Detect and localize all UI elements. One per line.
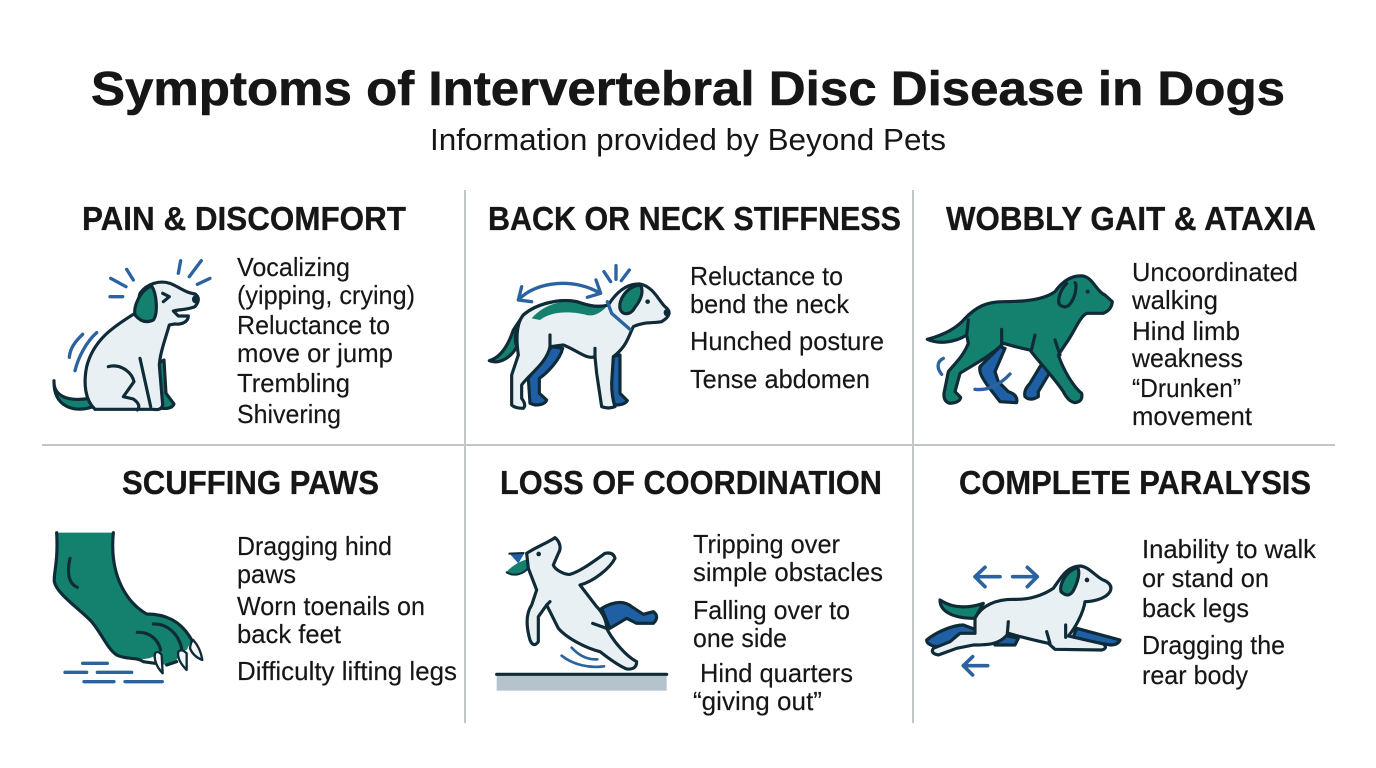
- subtitle: Information provided by Beyond Pets: [430, 122, 946, 157]
- icon: falling dog: [497, 538, 667, 691]
- icon: standing dog with stiff back: [489, 266, 670, 408]
- symptom list: “Drunken”: [1132, 373, 1241, 403]
- symptom list: back legs: [1142, 593, 1249, 623]
- symptom list: Dragging the: [1142, 630, 1285, 660]
- panel: scuffing paws: [54, 464, 457, 686]
- symptom list: move or jump: [237, 338, 393, 368]
- symptom list: [237, 252, 415, 429]
- symptom list: [690, 261, 884, 394]
- icon: paralysed dog dragging rear: [927, 566, 1120, 675]
- symptom list: Uncoordinated: [1132, 257, 1298, 287]
- heading: complete paralysis: COMPLETE PARALYSIS: [959, 464, 1311, 501]
- symptom list: Tripping over: [693, 529, 840, 559]
- symptom list: Worn toenails on: [237, 591, 425, 621]
- symptom list: [693, 529, 883, 716]
- title: Symptoms of Intervertebral Disc Disease in Dogs: [91, 63, 1285, 116]
- symptom list: movement: [1132, 401, 1253, 431]
- panel: complete paralysis: [927, 464, 1317, 690]
- symptom list: [1131, 257, 1298, 431]
- symptom list: “giving out”: [693, 686, 822, 716]
- symptom list: Tense abdomen: [690, 364, 870, 394]
- symptom list: simple obstacles: [693, 557, 883, 587]
- symptom list: back feet: [237, 619, 342, 649]
- icon: dragging paw: [54, 533, 202, 682]
- panel: wobbly gait and ataxia: [927, 200, 1316, 431]
- heading: back or neck stiffness: BACK OR NECK STIFFNESS: [488, 200, 901, 237]
- symptom list: or stand on: [1142, 563, 1269, 593]
- symptom list: Hind limb: [1132, 316, 1240, 346]
- heading: loss of coordination: LOSS OF COORDINATION: [500, 464, 882, 501]
- heading: wobbly gait and ataxia: WOBBLY GAIT & ATAXIA: [946, 200, 1316, 237]
- icon: wobbling teal dog: [927, 276, 1112, 403]
- symptom list: paws: [237, 559, 296, 589]
- symptom list: rear body: [1142, 660, 1248, 690]
- symptom list: Inability to walk: [1142, 534, 1317, 564]
- symptom list: walking: [1131, 285, 1218, 315]
- symptom list: one side: [693, 623, 787, 653]
- heading: pain and discomfort: PAIN & DISCOMFORT: [82, 200, 406, 237]
- symptom list: bend the neck: [690, 289, 850, 319]
- symptom list: (yipping, crying): [237, 280, 415, 310]
- symptom list: Dragging hind: [237, 531, 392, 561]
- symptom list: Hunched posture: [690, 326, 884, 356]
- symptom list: Shivering: [237, 399, 341, 429]
- panel: back or neck stiffness: [488, 200, 901, 408]
- heading: scuffing paws: SCUFFING PAWS: [122, 464, 379, 501]
- symptom list: weakness: [1131, 343, 1243, 373]
- symptom list: Reluctance to: [237, 310, 390, 340]
- panel: pain and discomfort: [54, 200, 415, 429]
- symptom list: Hind quarters: [700, 658, 853, 688]
- symptom list: [1142, 534, 1317, 690]
- symptom list: Reluctance to: [690, 261, 843, 291]
- symptom list: Falling over to: [693, 595, 850, 625]
- symptom list: Vocalizing: [237, 252, 350, 282]
- symptom list: Trembling: [237, 368, 350, 398]
- icon: sitting dog in pain: [54, 261, 210, 410]
- symptom list: Difficulty lifting legs: [237, 656, 457, 686]
- panel: loss of coordination: [497, 464, 883, 716]
- symptom list: [237, 531, 457, 686]
